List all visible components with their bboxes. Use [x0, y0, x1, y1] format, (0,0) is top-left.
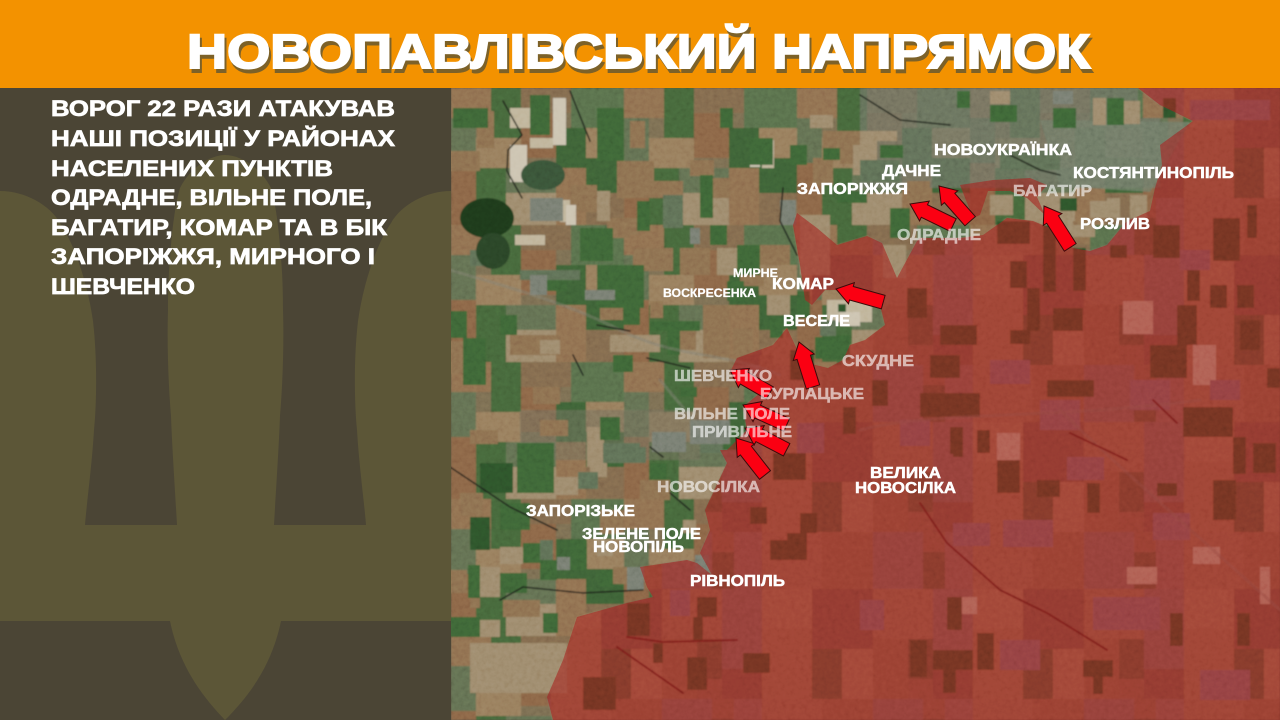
map labels: settlements: НОВОПІЛЬ	[593, 539, 684, 556]
arrow: toward Vesele	[792, 341, 820, 390]
map labels: settlements: ЗЕЛЕНЕ ПОЛЕ	[582, 526, 701, 543]
arrow: toward Dachne	[938, 185, 976, 226]
map: satellite view with occupied zone	[451, 88, 1280, 720]
map labels: settlements: ВОСКРЕСЕНКА	[663, 286, 756, 300]
map labels: settlements: ДАЧНЕ	[882, 163, 941, 180]
occupied zone overlay	[547, 88, 1280, 720]
map labels: settlements: РІВНОПІЛЬ	[690, 573, 785, 590]
map labels: settlements	[526, 141, 1234, 590]
text block: enemy attacks summary: НАШІ ПОЗИЦІЇ У РАЙОНАХ	[51, 126, 395, 151]
text block: enemy attacks summary: ВОРОГ 22 РАЗИ АТАКУВАВ	[51, 96, 395, 121]
map labels: settlements: НОВОУКРАЇНКА	[934, 141, 1072, 159]
text block: enemy attacks summary	[51, 96, 395, 299]
map labels: settlements: ЗАПОРІЖЖЯ	[797, 181, 908, 198]
map labels: settlements: ШЕВЧЕНКО	[674, 368, 772, 385]
arrow: toward Bagatyr	[1042, 205, 1077, 252]
arrow: toward Zaporizhzhia	[909, 200, 957, 232]
text block: enemy attacks summary: ШЕВЧЕНКО	[51, 274, 195, 299]
map labels: settlements: СКУДНЕ	[842, 353, 914, 370]
darkening wash over satellite image	[451, 88, 1280, 720]
text block: enemy attacks summary: НАСЕЛЕНИХ ПУНКТІВ	[51, 156, 333, 181]
text block: enemy attacks summary: ОДРАДНЕ, ВІЛЬНЕ ПОЛЕ,	[51, 185, 372, 210]
map labels: settlements: БАГАТИР	[1013, 183, 1092, 200]
arrow: toward Novosilka	[736, 437, 772, 480]
noise texture	[451, 88, 1280, 720]
header: orange title bar	[0, 0, 1280, 88]
map labels: settlements: НОВОСІЛКА	[855, 480, 956, 497]
text block: enemy attacks summary: БАГАТИР, КОМАР ТА В БІК	[51, 215, 388, 240]
arrow: toward Vilne Pole	[742, 400, 790, 432]
arrow: toward Komar	[835, 282, 886, 310]
map labels: settlements: МИРНЕ	[733, 266, 778, 280]
map labels: settlements: ЗАПОРІЗЬКЕ	[526, 503, 635, 520]
map labels: settlements: ОДРАДНЕ	[897, 227, 981, 244]
dark forest patches	[460, 160, 565, 269]
map labels: settlements: КОСТЯНТИНОПІЛЬ	[1073, 165, 1234, 182]
panel: left text panel with trident	[0, 96, 451, 720]
satellite field mosaic	[450, 88, 1280, 720]
arrow: toward Shevchenko	[729, 368, 774, 400]
map labels: settlements: ВЕСЕЛЕ	[783, 313, 850, 330]
title: НОВОПАВЛІВСЬКИЙ НАПРЯМОК	[187, 24, 1091, 79]
map labels: settlements: НОВОСІЛКА	[657, 479, 760, 496]
icon: trident emblem	[0, 155, 451, 720]
map labels: settlements: ПРИВІЛЬНЕ	[692, 424, 792, 441]
map labels: settlements: КОМАР	[772, 276, 834, 293]
text block: enemy attacks summary: ЗАПОРІЖЖЯ, МИРНОГО І	[51, 244, 375, 269]
map labels: settlements: БУРЛАЦЬКЕ	[760, 386, 864, 403]
map labels: settlements: ВЕЛИКА	[870, 465, 941, 482]
map labels: settlements: РОЗЛИВ	[1080, 216, 1150, 233]
rivers and gullies	[450, 91, 1280, 693]
arrow: toward Pryvilne	[744, 425, 790, 456]
map labels: settlements: ВІЛЬНЕ ПОЛЕ	[674, 406, 790, 423]
